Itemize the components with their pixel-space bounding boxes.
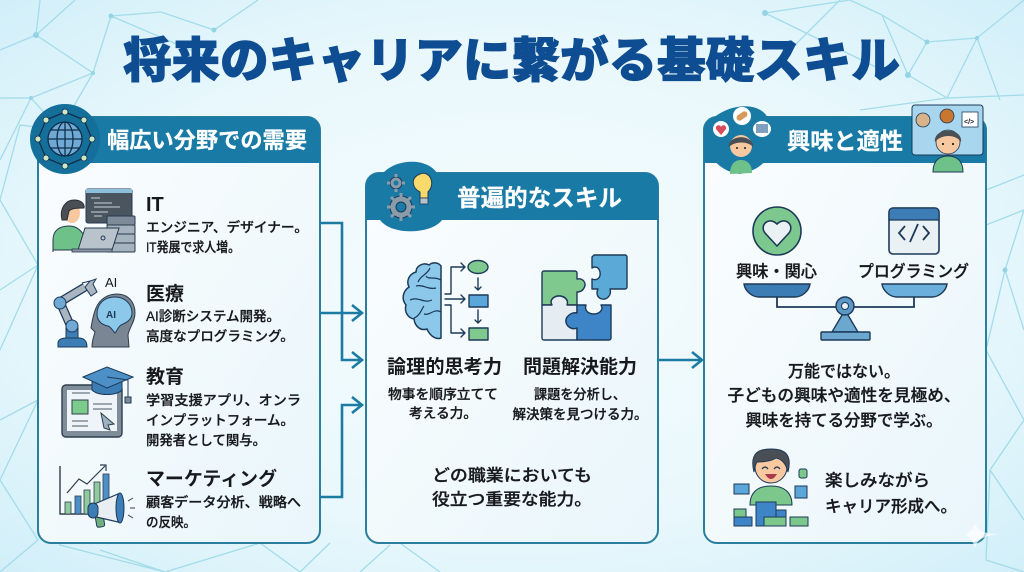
description: education: 学習支援アプリ、オンラ bbox=[146, 393, 301, 408]
message text: 子どもの興味や適性を見極め、 bbox=[728, 386, 960, 405]
description: IT line 2: IT発展で求人増。 bbox=[146, 239, 240, 255]
message text: 万能ではない。 bbox=[788, 362, 900, 381]
icon: robot arm and AI head: AI bbox=[106, 310, 116, 321]
item: education bbox=[62, 366, 301, 448]
icon: engineer at laptop bbox=[53, 189, 135, 252]
description: marketing line 2: の反映。 bbox=[146, 515, 196, 530]
icon: gears and light bulb bbox=[380, 162, 442, 231]
description: education line 2: インプラットフォーム。 bbox=[146, 413, 294, 428]
arrow: skills to aptitude bbox=[658, 352, 702, 368]
icon: child with interest bubbles bbox=[706, 106, 772, 174]
heading: universal skills: 普遍的なスキル bbox=[457, 185, 622, 211]
description: medical line 2: 高度なプログラミング。 bbox=[146, 328, 294, 344]
closing text bbox=[825, 470, 957, 516]
description: logical thinking: 物事を順序立てて bbox=[388, 387, 498, 402]
icon: balance scale bbox=[744, 284, 947, 340]
icon: brain flowchart bbox=[403, 260, 488, 340]
label: IT: IT bbox=[146, 194, 164, 216]
icon: globe network bbox=[30, 104, 100, 174]
summary text bbox=[432, 466, 592, 509]
icon: child playing with blocks bbox=[734, 449, 808, 526]
label: education: 教育 bbox=[146, 366, 184, 388]
label: programming: プログラミング bbox=[858, 262, 969, 281]
item: IT bbox=[53, 189, 308, 255]
arrow: medical to skills bbox=[320, 305, 362, 321]
title: 将来のキャリアに繋がる基礎スキル bbox=[123, 34, 900, 88]
message text bbox=[728, 362, 960, 430]
description: IT: エンジニア、デザイナー。 bbox=[146, 219, 308, 235]
description: education line 3: 開発者として関与。 bbox=[146, 433, 266, 448]
icon: robot arm and AI head bbox=[54, 275, 135, 347]
icon: child with interest card: </> bbox=[964, 119, 974, 126]
icon: robot arm and AI head: AI bbox=[105, 275, 117, 290]
panel: interest and aptitude bbox=[704, 105, 986, 543]
description: marketing: 顧客データ分析、戦略へ bbox=[146, 494, 301, 510]
panel: universal skills bbox=[366, 162, 658, 543]
closing text: キャリア形成へ。 bbox=[825, 497, 957, 516]
description: problem solving line 2: 解決策を見つける力。 bbox=[512, 406, 648, 422]
icon: child with interest card bbox=[912, 105, 983, 172]
closing text: 楽しみながら bbox=[825, 470, 930, 490]
icon: puzzle bbox=[542, 255, 627, 340]
description: medical: AI診断システム開発。 bbox=[146, 309, 280, 324]
item: medical bbox=[54, 275, 294, 347]
skill: problem solving bbox=[512, 255, 648, 422]
icon: code window bbox=[889, 208, 939, 254]
icon: heart in circle bbox=[753, 207, 801, 255]
heading: demand: 幅広い分野での需要 bbox=[107, 128, 307, 153]
label: interest: 興味・関心 bbox=[736, 262, 817, 281]
skill: logical thinking bbox=[387, 260, 502, 421]
description: logical thinking line 2: 考える力。 bbox=[409, 406, 477, 421]
arrow: marketing to skills bbox=[320, 397, 362, 497]
message text: 興味を持てる分野で学ぶ。 bbox=[746, 411, 942, 430]
label: problem solving: 問題解決能力 bbox=[523, 356, 637, 378]
heading: interest and aptitude: 興味と適性 bbox=[787, 128, 903, 154]
description: problem solving: 課題を分析し、 bbox=[534, 387, 626, 402]
arrow: top field to skills bbox=[320, 223, 362, 368]
icon: tablet and graduation cap bbox=[62, 367, 133, 437]
item: marketing bbox=[60, 465, 301, 530]
icon: chart and megaphone bbox=[60, 465, 135, 528]
label: logical thinking: 論理的思考力 bbox=[387, 356, 502, 378]
label: marketing: マーケティング bbox=[146, 467, 277, 490]
summary text: 役立つ重要な能力。 bbox=[432, 490, 592, 509]
panel: demand across fields bbox=[30, 104, 320, 543]
label: medical: 医療 bbox=[146, 283, 184, 305]
summary text: どの職業においても bbox=[432, 466, 592, 485]
